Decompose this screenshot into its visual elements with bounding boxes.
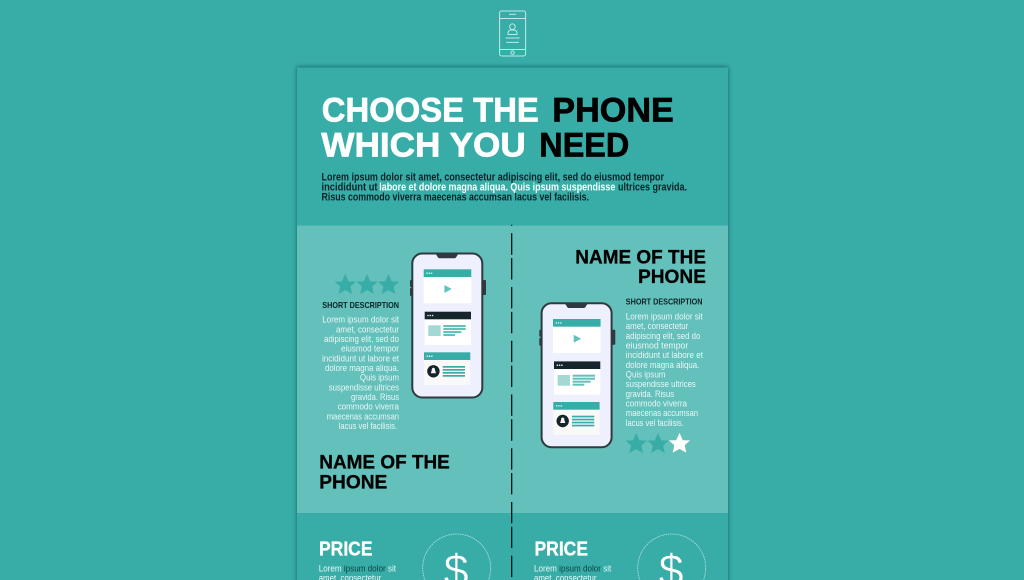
price text	[319, 563, 396, 580]
description text: incididunt ut labore et	[322, 353, 399, 363]
description text: commodo viverra	[338, 402, 399, 412]
price text	[534, 563, 612, 580]
description text: incididunt ut labore et	[626, 350, 703, 360]
right phone column	[539, 246, 706, 453]
price text: Lorem ipsum dolor sit	[319, 563, 396, 573]
description text: commodo viverra	[626, 398, 687, 408]
title: PHONE	[552, 92, 674, 130]
illustration: smartphone	[539, 303, 615, 447]
description text: lacus vel facilisis.	[339, 421, 397, 431]
description text	[626, 312, 703, 428]
phone name: PHONE	[638, 266, 706, 288]
center dashed divider	[511, 225, 513, 580]
description text: dolore magna aliqua.	[626, 360, 699, 370]
description text: adipiscing elit, sed do	[324, 334, 399, 344]
short description heading: SHORT DESCRIPTION	[626, 298, 703, 306]
description text: lacus vel facilisis.	[626, 418, 684, 428]
rating stars: two filled, one white	[626, 433, 690, 453]
description text: eiusmod tempor	[626, 340, 688, 350]
description text: Lorem ipsum dolor sit	[322, 315, 399, 325]
description text: suspendisse ultrices	[626, 379, 696, 389]
phone name: NAME OF THE	[575, 246, 706, 268]
description text: eiusmod tempor	[341, 344, 399, 354]
description text: Lorem ipsum dolor sit	[626, 312, 703, 322]
title: WHICH YOU	[321, 127, 526, 165]
phone name: NAME OF THE	[319, 451, 450, 473]
description text: gravida. Risus	[626, 389, 674, 399]
title	[321, 92, 674, 165]
intro paragraph: labore et dolore magna aliqua. Quis ipsum suspendisse	[379, 182, 615, 194]
description text: adipiscing elit, sed do	[626, 331, 700, 341]
description text: gravida. Risus	[351, 392, 399, 402]
intro paragraph: Lorem ipsum dolor sit amet, consectetur adipiscing elit, sed do eiusmod tempor	[322, 172, 665, 184]
card shadow	[297, 67, 728, 580]
panel: phone comparison	[297, 226, 728, 514]
intro paragraph: incididunt ut	[322, 182, 378, 194]
price text: Lorem ipsum dolor sit	[534, 563, 612, 573]
description text: amet, consectetur	[336, 324, 399, 334]
description text: maecenas accumsan	[626, 408, 698, 418]
description text: suspendisse ultrices	[329, 382, 399, 392]
right price block	[534, 534, 706, 580]
left phone column	[319, 254, 486, 493]
rating stars: three filled	[335, 274, 399, 294]
description text: Quis ipsum	[626, 370, 665, 380]
phone name	[575, 246, 706, 288]
phone name: PHONE	[319, 471, 387, 493]
description text: amet, consectetur	[626, 321, 688, 331]
phone name	[319, 451, 450, 493]
description text: dolore magna aliqua.	[325, 363, 399, 373]
panel: header	[297, 68, 728, 226]
title: NEED	[539, 127, 629, 165]
price heading: PRICE	[534, 539, 588, 561]
illustration: smartphone	[410, 254, 486, 398]
description text: maecenas accumsan	[327, 411, 399, 421]
intro paragraph	[322, 172, 687, 203]
intro paragraph: ultrices gravida.	[618, 182, 687, 194]
icon: phone with user profile	[500, 11, 526, 56]
icon: dollar in circle	[638, 534, 706, 580]
short description heading: SHORT DESCRIPTION	[322, 301, 399, 310]
price heading: PRICE	[319, 539, 372, 561]
description text	[322, 315, 399, 431]
title: CHOOSE THE	[322, 92, 539, 130]
left price block	[319, 534, 491, 580]
description text: Quis ipsum	[360, 373, 399, 383]
panel: price band	[297, 513, 728, 580]
intro paragraph: Risus commodo viverra maecenas accumsan lacus vel facilisis.	[322, 191, 589, 203]
icon: dollar in circle	[423, 534, 491, 580]
